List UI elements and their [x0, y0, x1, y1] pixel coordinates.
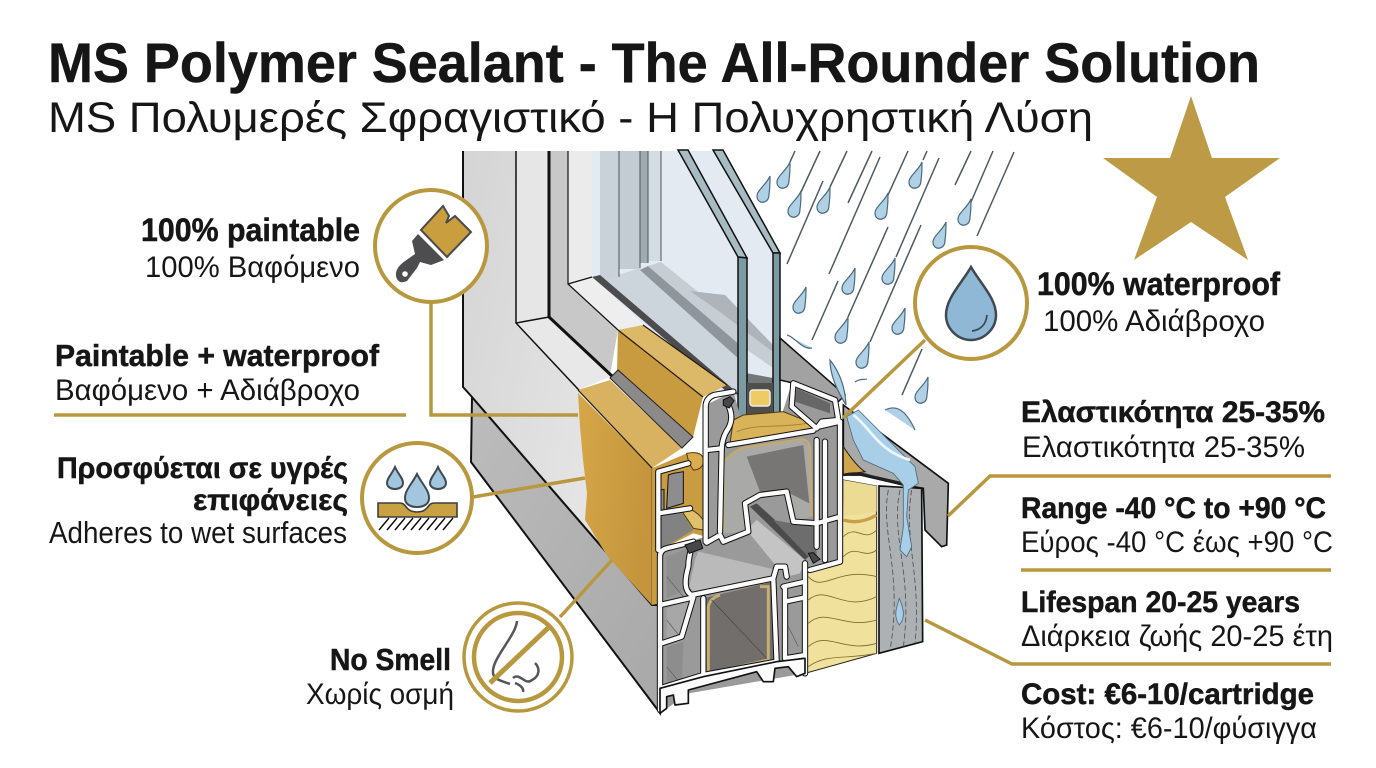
star	[1103, 96, 1280, 260]
water running over sill	[847, 410, 918, 557]
label: lifespan: Lifespan 20-25 years	[1021, 586, 1300, 619]
timber wall	[879, 486, 923, 653]
label: paintable + waterproof	[55, 338, 380, 407]
label: no smell: Χωρίς οσμή	[306, 678, 454, 711]
label: 100% paintable: 100% paintable	[141, 212, 360, 248]
gasket blobs	[685, 397, 820, 563]
label: adheres to wet surfaces: επιφάνειες	[193, 484, 348, 517]
water splashes	[787, 335, 915, 430]
label: cost: Cost: €6-10/cartridge	[1021, 678, 1314, 711]
profile walls outline	[658, 383, 840, 710]
metal sill	[843, 405, 948, 547]
sealant under sill	[843, 447, 865, 475]
sealant covered sill	[578, 325, 727, 605]
label: 100% paintable	[141, 212, 360, 284]
profile feet	[660, 658, 805, 713]
insulation	[805, 480, 877, 673]
profile walls white	[658, 383, 840, 710]
frame bands	[516, 151, 652, 468]
label: adheres to wet surfaces: Adheres to wet surfaces	[49, 515, 347, 550]
label: paintable + waterproof: Βαφόμενο + Αδιάβροχο	[55, 374, 360, 407]
rain	[757, 151, 1014, 403]
label: cost	[1021, 678, 1317, 745]
icon: paintbrush	[375, 190, 487, 302]
outer frame face	[463, 151, 652, 605]
subtitle: MS Πολυμερές Σφραγιστικό - Η Πολυχρηστική Λύση	[48, 94, 1093, 142]
label: paintable + waterproof: Paintable + waterproof	[55, 338, 380, 373]
label: lifespan	[1021, 586, 1333, 653]
water drip on timber	[896, 598, 903, 625]
label: elasticity	[1021, 396, 1325, 464]
label: temperature range: Εύρος -40 °C έως +90 °C	[1021, 526, 1333, 559]
label: 100% paintable: 100% Βαφόμενο	[145, 251, 360, 284]
label: 100% waterproof	[1037, 266, 1280, 338]
label: temperature range: Range -40 °C to +90 °C	[1021, 492, 1326, 525]
wall lower face	[471, 397, 660, 713]
label: temperature range	[1021, 492, 1333, 559]
label: 100% waterproof: 100% Αδιάβροχο	[1043, 305, 1265, 338]
label: adheres to wet surfaces	[49, 452, 348, 550]
label: no smell: No Smell	[330, 642, 451, 677]
window glass interior	[592, 151, 780, 415]
icon: water drop	[915, 247, 1027, 359]
rear metal strip	[780, 338, 845, 402]
window cross-section illustration	[463, 150, 948, 713]
label: no smell	[306, 642, 454, 711]
icon: no smell	[464, 603, 572, 711]
double glazing panes	[678, 150, 780, 417]
label: cost: Κόστος: €6-10/φύσιγγα	[1021, 712, 1317, 745]
label: lifespan: Διάρκεια ζωής 20-25 έτη	[1021, 620, 1333, 653]
profile section, drawn at 3x	[652, 383, 948, 713]
label: adheres to wet surfaces: Προσφύεται σε υγρές	[57, 452, 348, 485]
label: elasticity: Ελαστικότητα 25-35%	[1021, 396, 1325, 429]
label: elasticity: Ελαστικότητα 25-35%	[1022, 431, 1305, 464]
leader lines	[54, 303, 1331, 664]
title: MS Polymer Sealant - The All-Rounder Solution	[48, 31, 1260, 94]
label: 100% waterproof: 100% waterproof	[1037, 266, 1280, 302]
chamber fills	[652, 383, 840, 713]
icon: drops on wet surface	[362, 443, 472, 553]
